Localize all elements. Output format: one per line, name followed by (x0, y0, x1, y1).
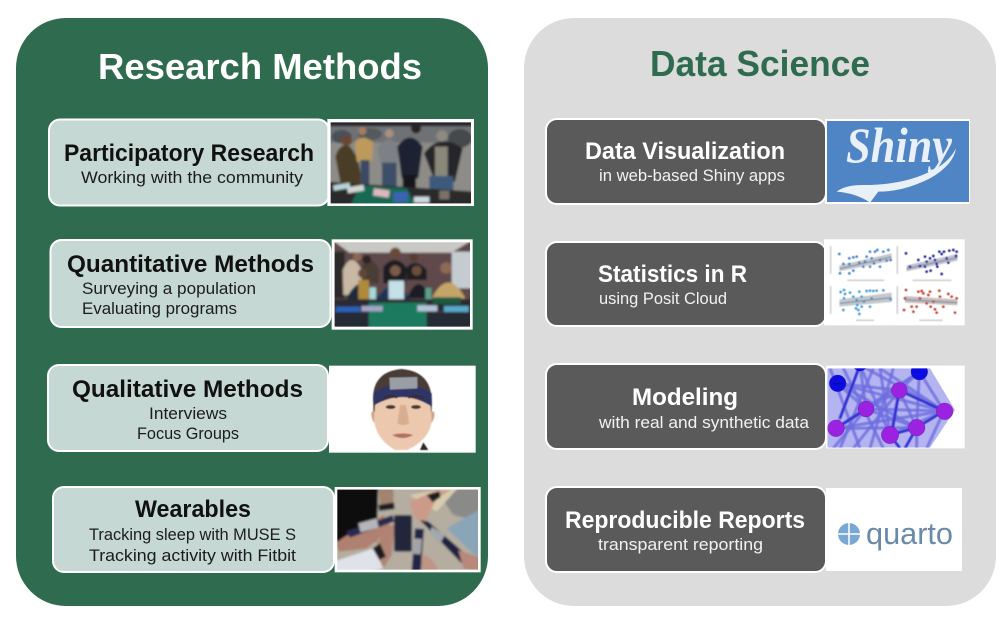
card: qualitative methods (48, 365, 328, 451)
scatter: mental wellbeing (839, 289, 892, 315)
photo: hands holding wearable devices (333, 486, 482, 574)
shiny swoosh (837, 148, 956, 203)
panel: data science (524, 18, 996, 606)
card: statistics in R (546, 242, 826, 326)
card: reproducible reports: transparent reporting (598, 535, 763, 554)
scatter: mental health promotion (838, 249, 892, 275)
card: wearables: Tracking sleep with MUSE S (89, 525, 296, 544)
scatter: mental ill-health prevention (905, 249, 958, 275)
card: statistics in R: Statistics in R (598, 261, 747, 288)
card: modeling: Modeling (632, 384, 738, 411)
chart: network graph (826, 356, 965, 448)
card: statistics in R: using Posit Cloud (599, 289, 727, 308)
photo: woman wearing MUSE headband (329, 366, 476, 453)
card: participatory research (49, 120, 329, 206)
card: wearables (53, 487, 334, 572)
card: quantitative methods: Evaluating programs (82, 299, 237, 318)
card: quantitative methods: Quantitative Methods (67, 251, 314, 278)
card: data visualization: in web-based Shiny apps (599, 166, 785, 185)
heading: data science: Data Science (650, 43, 870, 84)
logo: quarto (826, 488, 962, 571)
scatter: depression (903, 289, 958, 314)
card: qualitative methods: Focus Groups (137, 424, 239, 443)
card: modeling (546, 364, 826, 449)
logo: quarto: quarto (866, 516, 953, 551)
photo: research team at tent table (330, 238, 475, 332)
card: qualitative methods: Qualitative Methods (72, 376, 303, 403)
nodes: purple (828, 382, 953, 444)
card: modeling: with real and synthetic data (598, 413, 810, 432)
card: participatory research: Working with the community (81, 168, 304, 187)
chart: four scatter plots (824, 239, 965, 325)
heading: research methods: Research Methods (98, 46, 422, 87)
card: data visualization (546, 119, 826, 204)
card: quantitative methods: Surveying a population (82, 279, 256, 298)
node: blue: Hospital (833, 381, 843, 385)
logo: Shiny (825, 117, 970, 204)
card: quantitative methods (50, 240, 330, 327)
photo: people at community table (327, 118, 475, 207)
card: wearables: Wearables (135, 496, 251, 523)
card: qualitative methods: Interviews (149, 404, 227, 423)
card: participatory research: Participatory Research (64, 140, 314, 167)
card: data visualization: Data Visualization (585, 138, 785, 165)
card: reproducible reports (546, 487, 826, 572)
card: reproducible reports: Reproducible Reports (565, 507, 805, 534)
logo: Shiny: Shiny (846, 117, 953, 173)
card: wearables: Tracking activity with Fitbit (89, 546, 296, 565)
panel: research methods (16, 18, 488, 606)
